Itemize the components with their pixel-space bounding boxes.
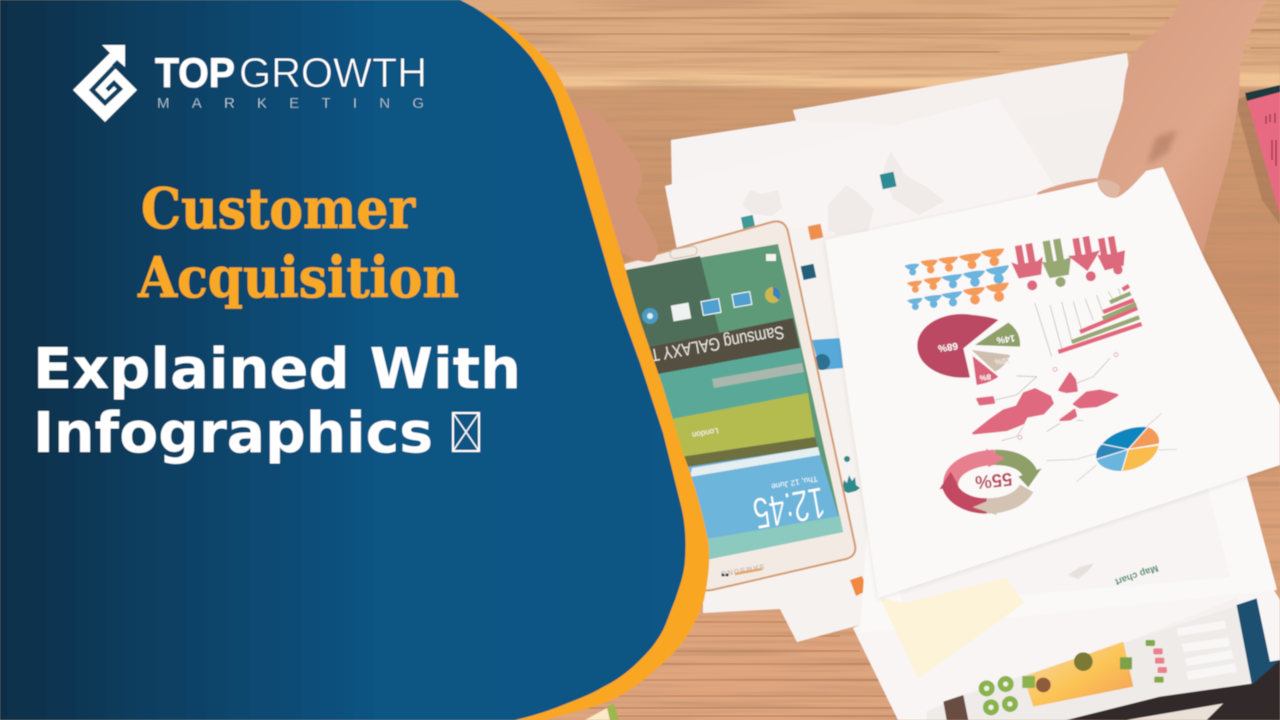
- tablet screen: [600, 244, 843, 560]
- logo: Top Growth Marketing: [73, 45, 427, 122]
- subheading: Explained With Infographics: [33, 337, 521, 466]
- icon: tag teal small: [741, 215, 755, 229]
- panel: navy gradient background: [0, 0, 686, 720]
- heading line 1: Customer: [141, 176, 416, 242]
- logo wordmark GROWTH: GROWTH: [239, 49, 427, 96]
- yellow note: [863, 562, 1024, 679]
- cycle label: 55%: [974, 469, 1013, 493]
- map leader lines: [995, 353, 1118, 441]
- cycle arcs: [949, 457, 1031, 506]
- faint map mark: [1068, 563, 1094, 579]
- icon grid: orange and blue figures: [906, 249, 1008, 309]
- icon row: red and green people: [1009, 234, 1129, 293]
- tablet app icons: [642, 254, 781, 324]
- logo icon: diamond G with arrow: [73, 45, 137, 122]
- sheet: lower fanned page: [853, 470, 1280, 720]
- small pie leader lines: [1047, 413, 1177, 482]
- small pie chart: [1047, 413, 1177, 482]
- cream corner: [1127, 703, 1223, 720]
- list rows: [1177, 621, 1237, 680]
- tablet bottom logo: SAMSUNG: [719, 562, 765, 579]
- sheet: back paper top: [793, 53, 1140, 198]
- sheet: back paper left: [671, 120, 900, 190]
- green tags: [1022, 676, 1035, 688]
- bottom sliver of cream and green: [585, 704, 619, 720]
- panel accent: orange curve: [400, 0, 709, 720]
- pie label 14%: 14%: [995, 333, 1016, 346]
- green rings: [979, 676, 1018, 715]
- pie chart: share: [917, 314, 1020, 385]
- top edge highlight: [0, 0, 310, 2]
- dark corner: [1067, 660, 1280, 720]
- icon: blue block: [812, 338, 843, 370]
- tablet: [574, 0, 1280, 720]
- icon: tag navy: [801, 264, 816, 280]
- subheading line 1: Explained With: [33, 337, 521, 402]
- icon: orange tag lower: [850, 576, 868, 596]
- tablet location: London: [691, 426, 719, 440]
- pie label 68%: 68%: [937, 340, 958, 353]
- orange photo: [1023, 642, 1133, 707]
- world map: [973, 353, 1118, 441]
- pie label 10%: 10%: [994, 355, 1011, 366]
- sheet: bottom ui print: [927, 598, 1280, 720]
- hand: right hand holding papers: [1097, 0, 1267, 253]
- icon: tag teal: [880, 172, 897, 189]
- cycle chart 55%: [939, 449, 1042, 515]
- sheet: third page: [860, 470, 1277, 633]
- tablet home button: [670, 246, 698, 259]
- sheet: paper column right of tablet: [703, 225, 915, 642]
- hand: finger behind main sheet: [1037, 178, 1100, 200]
- icon: teal trees: [842, 456, 860, 493]
- subheading line 2: Infographics: [33, 401, 433, 466]
- sheet: second page with map chart: [880, 470, 1230, 605]
- heading: Customer Acquisition: [137, 176, 459, 311]
- logo wordmark TOP: TOP: [155, 49, 235, 96]
- print panel: [927, 606, 1252, 720]
- tablet search bar: [712, 363, 804, 388]
- brown strip: [943, 695, 968, 720]
- tablet speaker: [735, 569, 762, 574]
- pie label 8%: 8%: [979, 372, 992, 383]
- tablet body: [600, 221, 855, 600]
- tablet date: Thu, 12 June: [770, 474, 818, 491]
- dark teal bar: [1207, 598, 1280, 720]
- sheet: faded map page: [665, 98, 1062, 255]
- icon: tag orange: [808, 224, 823, 240]
- main infographic sheet: [825, 167, 1280, 598]
- heading line 2: Acquisition: [137, 245, 459, 311]
- tablet brand text: Samsung GALAXY Tab: [635, 322, 786, 368]
- cycle arrowheads: [986, 449, 1005, 467]
- finger: left hand over tablet corner: [574, 107, 658, 262]
- toggle list: [1146, 640, 1167, 683]
- missing-glyph box: [453, 413, 479, 451]
- chart label: Map chart: [1113, 562, 1160, 587]
- hand crease: [1147, 130, 1177, 165]
- logo tagline: MARKETING: [157, 95, 424, 112]
- highlighter pen: [1235, 85, 1280, 225]
- printed infographic content: [906, 234, 1177, 515]
- bar chart: slanted bars: [1035, 286, 1142, 357]
- tablet clock: 12:45: [749, 477, 829, 538]
- sheet: stack under main page, right: [1020, 105, 1135, 198]
- thumbnail: [1097, 179, 1120, 198]
